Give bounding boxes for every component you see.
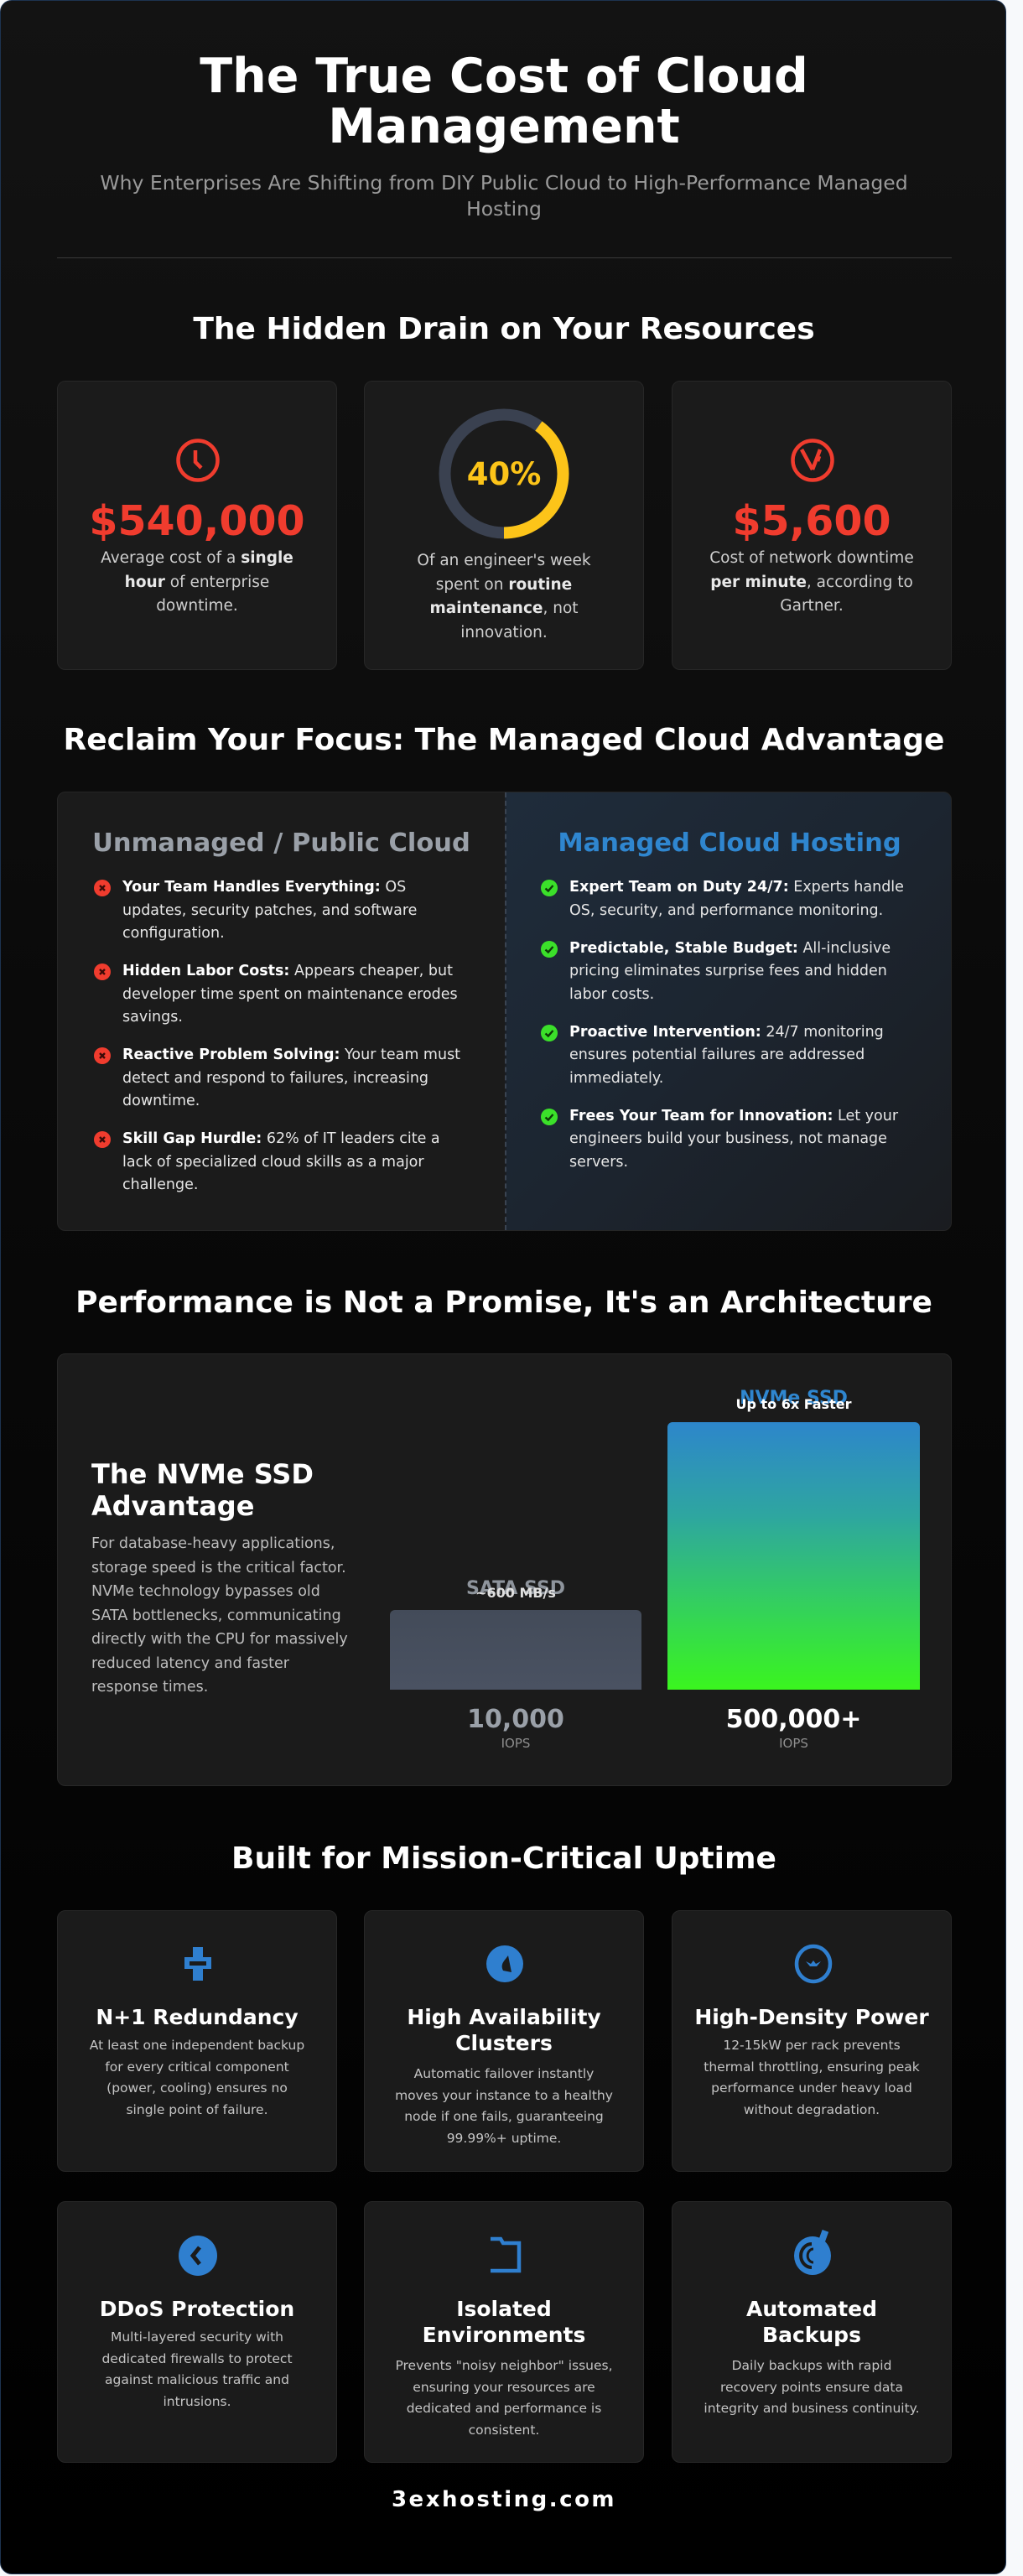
icon: plus: [184, 1947, 211, 1981]
icon: cluster: [486, 1945, 523, 1982]
list: benefits: [541, 879, 904, 1171]
card text: Backups: [762, 2323, 861, 2347]
stat card: 40% engineer time: [364, 381, 644, 670]
list: benefits: Expert Team on Duty 24/7: Experts handle OS, security, and performance monitoring.: [569, 879, 904, 919]
card text: At least one independent backup for every critical component (power, cooling) ensures no single point of failure.: [90, 2038, 304, 2116]
donut chart 40%: [439, 409, 569, 538]
list: benefits: Predictable, Stable Budget: All-inclusive pricing eliminates surprise fees and hidden labor costs.: [569, 939, 891, 1003]
card text: 12-15kW per rack prevents thermal throttling, ensuring peak performance under heavy load without degradation.: [704, 2038, 920, 2116]
bar: NVMe SSD: [667, 1388, 920, 1751]
card text: Daily backups with rapid recovery points ensure data integrity and business continuity.: [704, 2358, 920, 2416]
icon: shield: [179, 2236, 217, 2276]
card text: Isolated Environments: [423, 2297, 585, 2347]
panel: comparison: [57, 792, 952, 1231]
column: unmanaged: [92, 828, 470, 1193]
stat card: downtime hour: [57, 381, 337, 670]
column title: Unmanaged / Public Cloud: [92, 828, 470, 858]
card text: [694, 2005, 929, 2116]
list: drawbacks: Skill Gap Hurdle: 62% of IT leaders cite a lack of specialized cloud skills as a major challenge.: [122, 1130, 440, 1193]
icon: clock: [176, 439, 220, 482]
bar: SATA SSD: ~600 MB/s: [475, 1585, 556, 1601]
card text: N+1 Redundancy: [96, 2005, 299, 2029]
list: drawbacks: Hidden Labor Costs: Appears cheaper, but developer time spent on maintenance erodes savings.: [122, 963, 458, 1026]
title: [200, 49, 808, 154]
card text: Multi-layered security with dedicated firewalls to protect against malicious traffic and intrusions.: [101, 2329, 293, 2408]
list: drawbacks: [94, 879, 460, 1193]
list: benefits: Frees Your Team for Innovation: Let your engineers build your business, not manage servers.: [569, 1107, 898, 1171]
stat description: Cost of network downtime per minute, according to Gartner.: [709, 549, 914, 615]
card: N+1 redundancy: [57, 1910, 337, 2172]
panel: NVMe performance: [57, 1353, 952, 1786]
card text: [395, 2297, 613, 2437]
card text: [704, 2297, 920, 2416]
bar: NVMe SSD: Up to 6x Faster: [736, 1396, 851, 1412]
card: DDoS: [57, 2201, 337, 2463]
title: Management: [328, 99, 680, 154]
bar: NVMe SSD: 500,000+: [726, 1705, 861, 1734]
subtitle: Why Enterprises Are Shifting from DIY Public Cloud to High-Performance Managed Hosting: [100, 171, 908, 221]
bar: NVMe SSD: NVMe SSD: [740, 1388, 848, 1409]
list: drawbacks: Reactive Problem Solving: Your team must detect and respond to failures, increasing downtime.: [122, 1046, 460, 1109]
stat number: $540,000: [89, 497, 305, 545]
stat number: $5,600: [732, 497, 891, 545]
card text: High-Density Power: [694, 2005, 929, 2029]
column: managed: [505, 792, 953, 1230]
icon: broken symbol: [791, 439, 834, 482]
icon: backup: [794, 2230, 831, 2275]
icon: folder: [491, 2237, 522, 2272]
list: drawbacks: Your Team Handles Everything: OS updates, security patches, and software configuration.: [122, 879, 417, 942]
text block: NVMe advantage: For database-heavy applications, storage speed is the critical factor. NVMe technology bypasses old SATA bottlenecks, communicating directly with the CPU for massively reduced latency and faster response times.: [91, 1535, 348, 1696]
card: isolated environments: [364, 2201, 644, 2463]
card: HA clusters: [364, 1910, 644, 2172]
list: benefits: Proactive Intervention: 24/7 monitoring ensures potential failures are addressed immediately.: [569, 1023, 884, 1087]
bar: SATA SSD: SATA SSD: [466, 1578, 565, 1599]
heading: performance: Performance is Not a Promise, It's an Architecture: [75, 1285, 932, 1320]
donut chart 40%: 40%: [467, 456, 541, 492]
bar: SATA SSD: [390, 1578, 641, 1751]
heading: uptime: Built for Mission-Critical Uptime: [231, 1841, 776, 1876]
stat description: Average cost of a single hour of enterprise downtime.: [101, 549, 293, 615]
bar: SATA SSD: 10,000: [467, 1705, 564, 1734]
card text: High Availability Clusters: [407, 2005, 601, 2055]
card text: [100, 2297, 294, 2408]
card: power: [672, 1910, 952, 2172]
title: The True Cost of Cloud: [200, 49, 808, 104]
footer: brand: 3exhosting.com: [392, 2487, 616, 2512]
bar: NVMe SSD: IOPS: [779, 1736, 808, 1751]
icon: power ring: [795, 1944, 832, 1984]
column title: Managed Cloud Hosting: [558, 828, 901, 858]
card: backups: [672, 2201, 952, 2463]
card text: DDoS Protection: [100, 2297, 294, 2321]
bar chart: SATA vs NVMe: [390, 1388, 920, 1751]
stat card: downtime per minute: [672, 381, 952, 670]
bar: SATA SSD: IOPS: [501, 1736, 530, 1751]
text block: NVMe advantage: The NVMe SSD Advantage: [91, 1458, 314, 1522]
card text: [395, 2005, 613, 2145]
card text: Automatic failover instantly moves your instance to a healthy node if one fails, guaranteeing 99.99%+ uptime.: [395, 2066, 613, 2145]
heading: hidden drain: The Hidden Drain on Your Resources: [193, 312, 815, 346]
card text: Automated: [746, 2297, 877, 2321]
stat description: Of an engineer's week spent on routine maintenance, not innovation.: [417, 552, 591, 641]
text block: NVMe advantage: [91, 1458, 348, 1696]
card text: Prevents "noisy neighbor" issues, ensuring your resources are dedicated and performance is consistent.: [395, 2358, 613, 2437]
heading: reclaim focus: Reclaim Your Focus: The Managed Cloud Advantage: [64, 723, 944, 757]
